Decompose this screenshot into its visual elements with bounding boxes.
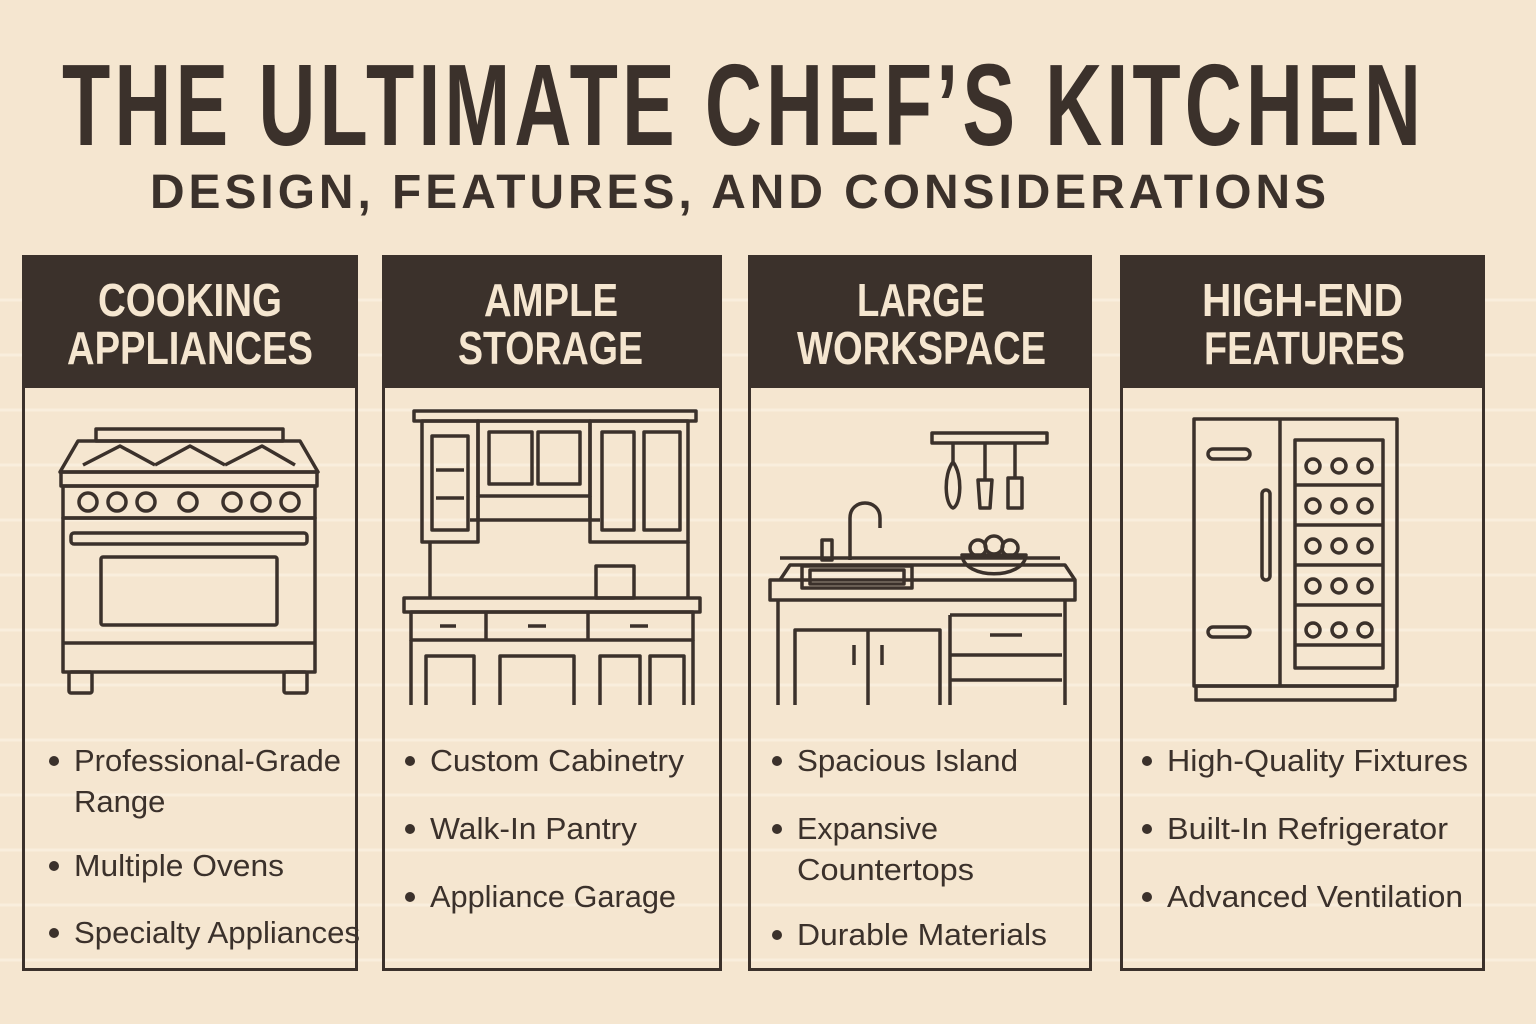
heading: high-end features: HIGH-END	[1202, 274, 1403, 326]
bullets: large workspace: Spacious Island	[797, 743, 1018, 778]
icon: range stove	[60, 429, 318, 693]
icon: kitchen island	[770, 433, 1075, 705]
heading: high-end features: FEATURES	[1204, 322, 1405, 374]
icon: refrigerator with wine rack	[1194, 419, 1397, 700]
bullets: large workspace: Durable Materials	[797, 917, 1047, 952]
bullets: cooking appliances	[49, 743, 360, 950]
bullets: large workspace: Countertops	[797, 852, 974, 887]
bullets: high-end features: Built-In Refrigerator	[1167, 811, 1448, 846]
heading: ample storage	[458, 274, 643, 374]
bullets: large workspace	[772, 743, 1047, 952]
bullets: high-end features: Advanced Ventilation	[1167, 879, 1463, 914]
bullets: ample storage	[405, 743, 685, 914]
panel: ample storage	[382, 255, 722, 970]
bullets: ample storage: Custom Cabinetry	[430, 743, 685, 778]
heading: cooking appliances: APPLIANCES	[67, 322, 313, 374]
bullets: cooking appliances: Multiple Ovens	[74, 848, 284, 883]
bullets: cooking appliances: Specialty Appliances	[74, 915, 360, 950]
panel: large workspace	[748, 255, 1092, 970]
heading: high-end features	[1202, 274, 1405, 374]
icon: cabinets	[404, 411, 700, 705]
heading: large workspace: LARGE	[857, 274, 985, 326]
bullets: ample storage: Appliance Garage	[430, 879, 676, 914]
heading: ample storage: AMPLE	[484, 274, 618, 326]
panel: cooking appliances	[22, 255, 360, 970]
subtitle: DESIGN, FEATURES, AND CONSIDERATIONS	[150, 166, 1330, 219]
heading: cooking appliances	[67, 274, 313, 374]
bullets: ample storage: Walk-In Pantry	[430, 811, 638, 846]
heading: ample storage: STORAGE	[458, 322, 643, 374]
heading: large workspace	[797, 274, 1046, 374]
heading: large workspace: WORKSPACE	[797, 322, 1046, 374]
bullets: high-end features: High-Quality Fixtures	[1167, 743, 1468, 778]
bullets: high-end features	[1142, 743, 1468, 914]
bullets: large workspace: Expansive	[797, 811, 938, 846]
panel: high-end features	[1120, 255, 1485, 970]
bullets: cooking appliances: Professional-Grade	[74, 743, 341, 778]
heading: cooking appliances: COOKING	[98, 274, 282, 326]
bullets: cooking appliances: Range	[74, 784, 165, 819]
